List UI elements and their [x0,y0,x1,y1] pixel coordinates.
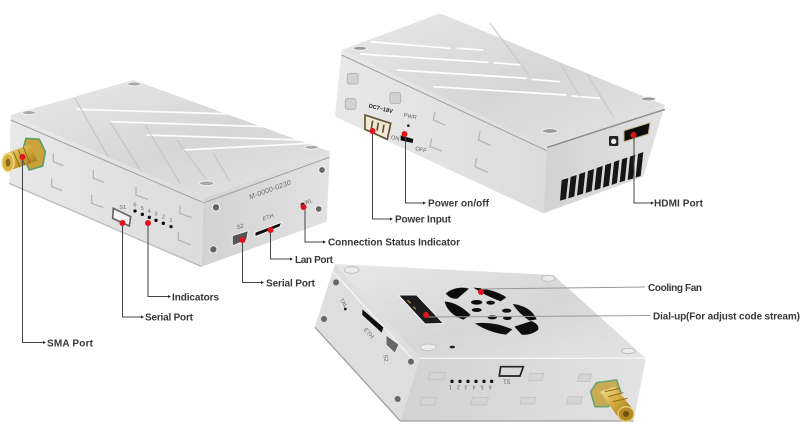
serial port S1 [499,367,523,383]
dial-up switch [398,295,443,324]
power switch [390,113,427,155]
camera icon [609,136,618,146]
left panel [315,264,420,422]
indicators: 5 [481,383,484,389]
callout: Power Input [370,128,452,226]
indicators: 1 [449,383,452,389]
underside face [335,264,646,358]
callout: Serial Port S2 [240,237,316,290]
small hole [450,346,455,348]
indicators [133,202,173,228]
callout: SMA Port: SMA Port [47,338,94,350]
callout: Power on/off [402,131,490,210]
serial port S2 and ethernet port: ETH [262,213,276,223]
indicators [449,380,493,389]
serial port S1: S1 [503,377,511,383]
left panel: TAL [338,298,348,309]
screws [353,46,656,133]
status LED [301,198,314,207]
callout: SMA Port [20,154,94,350]
front panel [400,358,646,422]
HDMI port [624,123,650,142]
indicators: 6 [489,383,492,389]
indicators: 5 [141,206,144,212]
device: top right view, power and HDMI side [335,13,665,213]
front panel [202,152,330,267]
indicators: 4 [148,209,151,215]
cooling vents [560,152,643,201]
serial port S2 and ethernet port [232,213,282,246]
top face [342,13,665,147]
callout: HDMI Port: HDMI Port [654,198,704,210]
top face [11,80,330,198]
serial port S1 [113,205,131,226]
callout: Dial-up [423,312,800,322]
SMA connector [2,138,45,172]
power switch: OFF [415,146,427,155]
screws [22,82,325,253]
indicators: 6 [133,202,136,208]
indicators: 4 [473,383,476,389]
callout: Power Input: Power Input [395,214,452,226]
callout: Connection Status Indicator [300,204,460,248]
power switch: PWR [403,113,417,121]
callout: Lan Port [268,227,334,266]
callout: Serial Port S1: Serial Port [145,312,194,324]
side panel [9,115,203,267]
model number: M-0000-0230 [248,180,292,201]
serial port S1: S1 [119,205,126,211]
indicators: 2 [457,383,460,389]
callout: Indicators: Indicators [172,292,219,304]
device: left view, antenna and indicators side [2,80,330,267]
indicators: 2 [162,215,165,221]
SMA connector [591,380,634,421]
callout: Serial Port S1 [120,220,194,324]
device: bottom view, fan side [315,264,646,422]
callout: Power on/off: Power on/off [428,198,490,210]
serial port S2 and ethernet port: S2 [236,223,245,231]
cooling fan [445,288,538,335]
indicators: 1 [169,218,172,224]
left panel: ETH [362,327,374,340]
callout: Lan Port: Lan Port [295,255,334,266]
callout: Dial-up: Dial-up(For adjust code stream) [653,312,800,322]
status LED: WL [304,198,314,206]
power input connector [365,103,393,139]
power switch: ON [390,135,400,143]
screws [344,267,635,354]
callout: HDMI Port [630,132,704,210]
callout: Cooling Fan: Cooling Fan [648,283,702,294]
side panel [335,50,547,213]
callout: Indicators [145,220,219,304]
indicators: 3 [154,212,157,218]
callout: Connection Status Indicator: Connection Status Indicator [328,238,460,248]
left panel: S2 [381,354,388,362]
indicators: 3 [465,383,468,389]
callout: Cooling Fan [478,283,702,295]
callout: Serial Port S2: Serial Port [266,278,316,290]
power input connector: DC7~18V [368,103,393,115]
front panel [543,105,665,213]
